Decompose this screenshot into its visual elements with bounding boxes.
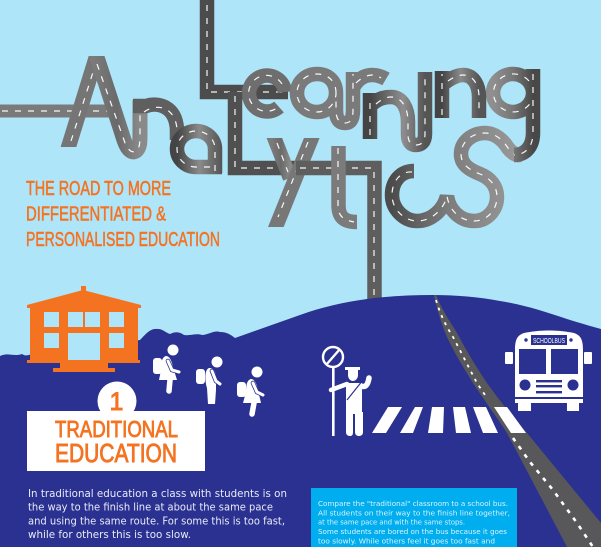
road letter: A crossbar <box>0 104 118 118</box>
subtitle: DIFFERENTIATED & <box>26 204 166 226</box>
road letter: A left leg <box>66 48 99 155</box>
road to the horizon <box>434 295 601 547</box>
callout: school bus comparison: at the same pace and with the same stops. <box>318 518 465 526</box>
icon: school bus: SCHOOLBUS <box>533 338 565 345</box>
heading text <box>55 416 178 468</box>
body text: traditional education: while for others this is too slow. <box>28 528 191 541</box>
callout: school bus comparison: All students on their way to the finish line together, <box>318 508 510 518</box>
body text: traditional education: the way to the finish line at about the same pace <box>28 500 273 514</box>
callout: school bus comparison: too slowly. While others feel it goes too fast and <box>318 536 495 546</box>
road letter: t crossbar and long drop <box>296 168 374 300</box>
hill with bushes <box>0 295 601 547</box>
road letter: second L <box>235 92 300 168</box>
icon: student 3 <box>237 366 263 414</box>
heading text: EDUCATION <box>55 440 177 468</box>
road letter: e <box>249 75 285 112</box>
road letter: big L <box>207 0 288 92</box>
callout: school bus comparison <box>311 488 517 547</box>
crosswalk <box>372 407 526 433</box>
road letter: A right leg and n <box>94 48 140 152</box>
stop sign <box>323 347 343 436</box>
icon: student 1 <box>153 344 179 391</box>
number circle <box>98 382 136 420</box>
callout: school bus comparison: Compare the "traditional" classroom to a school bus. <box>318 499 508 508</box>
icon: crossing guard <box>323 347 369 436</box>
road letter: n arch <box>133 105 177 140</box>
icon: school bus <box>505 330 592 411</box>
body text: traditional education: In traditional education a class with students is on <box>28 487 287 500</box>
number 1: 1 <box>110 388 123 416</box>
road letter: final n <box>442 71 479 118</box>
subtitle: THE ROAD TO MORE <box>26 178 171 200</box>
callout: school bus comparison: Some students are bored on the bus because it goes <box>318 527 507 536</box>
road letter: g <box>493 69 533 155</box>
road lettering: Learning Analytics <box>0 0 533 300</box>
icon: student 2 <box>196 356 222 404</box>
road letter: y <box>272 130 315 234</box>
body text: traditional education: and using the same route. For some this is too fast, <box>28 514 285 528</box>
heading text: TRADITIONAL <box>55 416 178 442</box>
road letter: c and s <box>392 133 520 221</box>
road letter: a and r <box>297 72 386 123</box>
heading panel <box>27 411 205 471</box>
road letter: middle n and u <box>370 72 425 145</box>
road letter: a <box>177 131 222 173</box>
body text: traditional education <box>28 487 287 541</box>
subtitle <box>26 178 220 251</box>
subtitle: PERSONALISED EDUCATION <box>26 229 220 251</box>
icon: school building <box>27 286 141 372</box>
road letter: t stem <box>338 146 357 222</box>
heading badge: traditional education <box>27 382 205 471</box>
guard figure <box>331 367 369 436</box>
